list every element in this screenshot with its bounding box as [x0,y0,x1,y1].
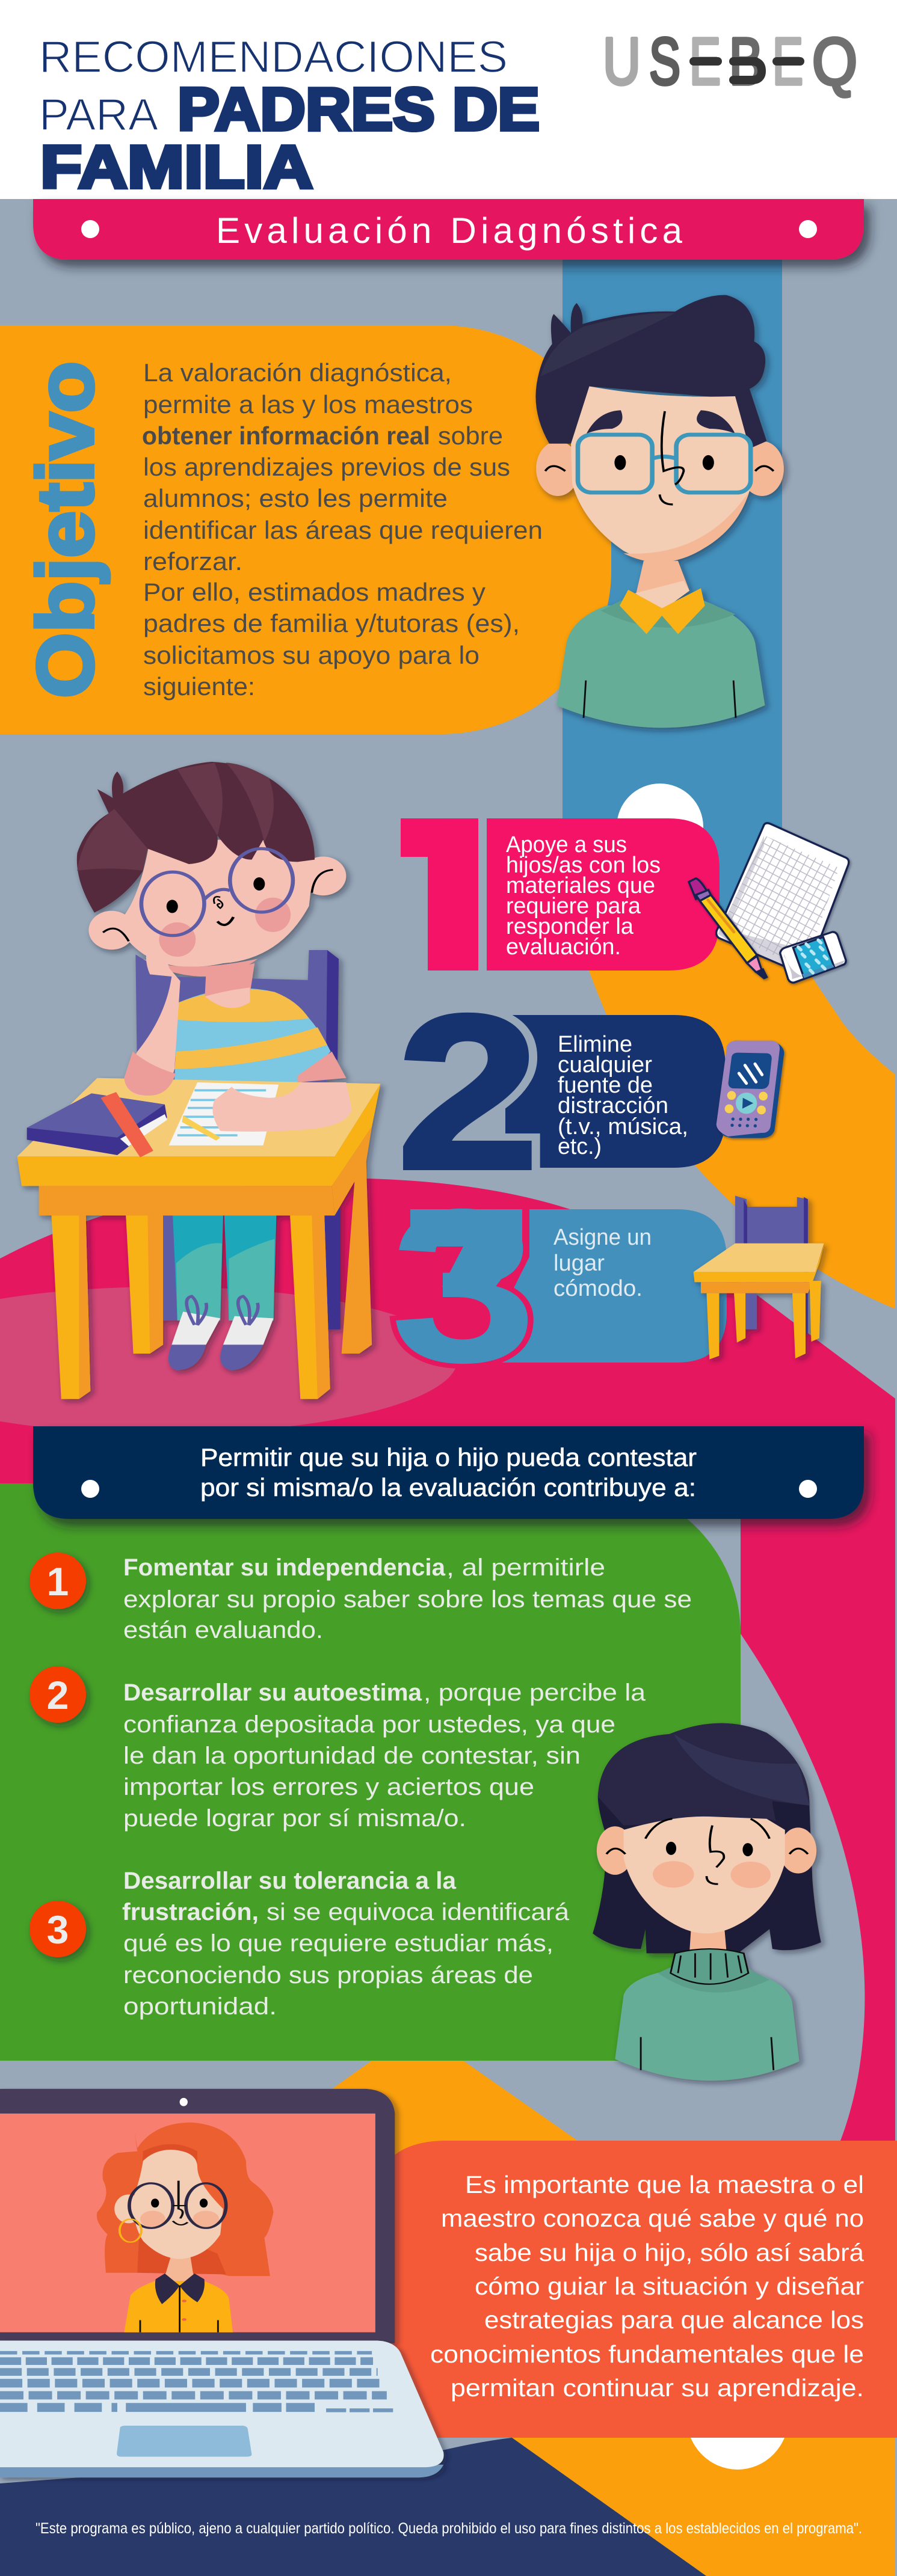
item 2: puede lograr por sí misma/o. [123,1805,466,1832]
illustration: girl [593,1723,821,2081]
step 2 text: distracción [558,1093,668,1118]
number 3: 3 [390,1164,537,1408]
item 1: 1 [47,1559,69,1604]
text block: objective description: siguiente: [143,672,255,701]
logo: USEBEQ: S [649,25,680,99]
step 1 text: evaluación. [506,934,621,960]
text block: objective description: reforzar. [143,547,242,575]
title [39,32,540,201]
text block: objective description: permite a las y los maestros [143,390,473,419]
icon: small desk and chair [694,1196,824,1360]
number 2: 2 [397,970,539,1215]
step 1 [401,818,720,971]
eraser [780,932,846,983]
text block: objective description: alumnos; esto les permite [143,484,448,512]
item 2: importar los errores y aciertos que [123,1774,534,1800]
item 1: están evaluando. [123,1617,323,1643]
message text: estrategias para que alcance los [484,2306,864,2334]
logo: USEBEQ: U [603,25,641,99]
item 3: si se equivoca identificará [267,1899,570,1925]
step 3 text: cómodo. [553,1276,643,1301]
desk [17,1078,380,1399]
illustration: man with glasses [535,295,784,728]
keyboard [0,2353,393,2410]
logo: USEBEQ: E [772,25,803,99]
heading: Objetivo: Objetivo [21,361,109,698]
message text: permitan continuar su aprendizaje. [451,2374,864,2402]
title: FAMILIA [40,133,313,201]
raised arm [124,943,180,1096]
item 3: reconociendo sus propias áreas de [123,1962,533,1989]
illustration: laptop [0,2089,444,2477]
teacher in screen [97,2123,274,2332]
item 3: Desarrollar su tolerancia a la [123,1868,457,1894]
banner: Evaluación Diagnóstica: Evaluación Diagnóstica [216,210,683,251]
number 1 [401,818,478,971]
banner: contribuye: Permitir que su hija o hijo pueda contestar [200,1443,697,1471]
text block: objective description: los aprendizajes previos de sus [143,453,510,481]
item 2: le dan la oportunidad de contestar, sin [123,1743,581,1769]
step 3 text [553,1225,652,1301]
message text: Es importante que la maestra o el [465,2171,864,2198]
text block: objective description: sobre [438,422,503,450]
text block: objective description: identificar las áreas que requieren [143,516,543,544]
laptop base [0,2341,444,2477]
text block: objective description: padres de familia y/tutoras (es), [143,609,520,637]
text block: objective description [142,358,543,701]
item 1: , al permitirle [446,1554,605,1581]
illustration: boy at desk [17,762,380,1399]
step 1 panel [487,818,720,971]
step 1 text: responder la [506,914,634,939]
torso [174,963,331,1082]
number 2: 2 [397,970,539,1215]
item 1 [29,1553,692,1643]
text block: objective description: Por ello, estimados madres y [143,578,485,606]
panel: importance message [385,2141,897,2438]
step 1 text: Apoye a sus [506,832,627,857]
message text: conocimientos fundamentales que le [430,2340,864,2368]
number 1: 1 [394,775,514,1017]
panel: objetivo [0,325,611,734]
pencil [689,879,767,978]
step 2 text: fuente de [558,1073,653,1098]
step 3 panel [502,1209,727,1363]
step 2 text [558,1032,688,1159]
banner: contribuye: por si misma/o la evaluación contribuye a: [200,1473,696,1501]
step 3 text: lugar [553,1251,605,1276]
step 2 [397,970,726,1215]
message text: cómo guiar la situación y diseñar [475,2272,864,2300]
logo: USEBEQ [603,25,857,99]
item 3: qué es lo que requiere estudiar más, [123,1930,553,1957]
chair [135,950,341,1329]
message text [430,2171,864,2402]
item 3: oportunidad. [123,1993,277,2020]
step 2 text: etc.) [558,1134,602,1159]
item 2: Desarrollar su autoestima [123,1679,422,1706]
message text: sabe su hija o hijo, sólo así sabrá [475,2239,864,2266]
item 2: 2 [47,1673,69,1717]
logo: USEBEQ: E [689,25,721,99]
title: RECOMENDACIONES [39,32,508,82]
item 1: Fomentar su independencia [123,1554,446,1581]
item 3: frustración, [122,1899,259,1925]
text block: objective description: La valoración diagnóstica, [143,358,452,387]
step 3 text: Asigne un [553,1225,652,1250]
step 1 text: requiere para [506,894,641,919]
logo: USEBEQ: Q [812,25,857,99]
step 2 text: Elimine [558,1032,632,1057]
step 1 text: hijos/as con los [506,853,661,878]
item 3 [29,1868,570,2020]
pants and shoes [168,1216,276,1370]
glasses and features [103,848,333,941]
text block: objective description: obtener información real [142,422,430,450]
ears and face [88,840,346,977]
touchpad [117,2426,251,2457]
step 1 text [506,832,661,960]
title: PARA [39,90,159,140]
step 3 [390,1164,727,1408]
title: PADRES DE [177,76,540,143]
writing arm [212,1052,352,1132]
text block: objective description: solicitamos su apoyo para lo [143,641,479,669]
hair [77,762,315,913]
banner: contribuye [33,1426,864,1519]
book and ruler [27,1092,167,1158]
step 2 panel [505,1015,726,1168]
item 2: confianza depositada por ustedes, ya que [123,1711,615,1738]
icon: grid paper, pencil and eraser [689,823,849,983]
icon: music player [717,1041,784,1138]
step 2 text: (t.v., música, [558,1114,688,1139]
item 3: 3 [47,1907,69,1952]
panel: contribuciones [0,1483,741,2061]
grid notebook [717,823,849,966]
banner: Evaluación Diagnóstica [33,199,864,260]
logo: USEBEQ: B [729,25,763,99]
paper and pencil [169,1082,279,1145]
laptop screen [0,2089,395,2343]
step 2 text: cualquier [558,1052,652,1078]
item 1: explorar su propio saber sobre los temas que se [123,1586,692,1613]
step 1 text: materiales que [506,873,655,898]
message text: maestro conozca qué sabe y qué no [441,2204,864,2232]
item 2 [29,1666,646,1832]
item 2: , porque percibe la [424,1679,646,1706]
